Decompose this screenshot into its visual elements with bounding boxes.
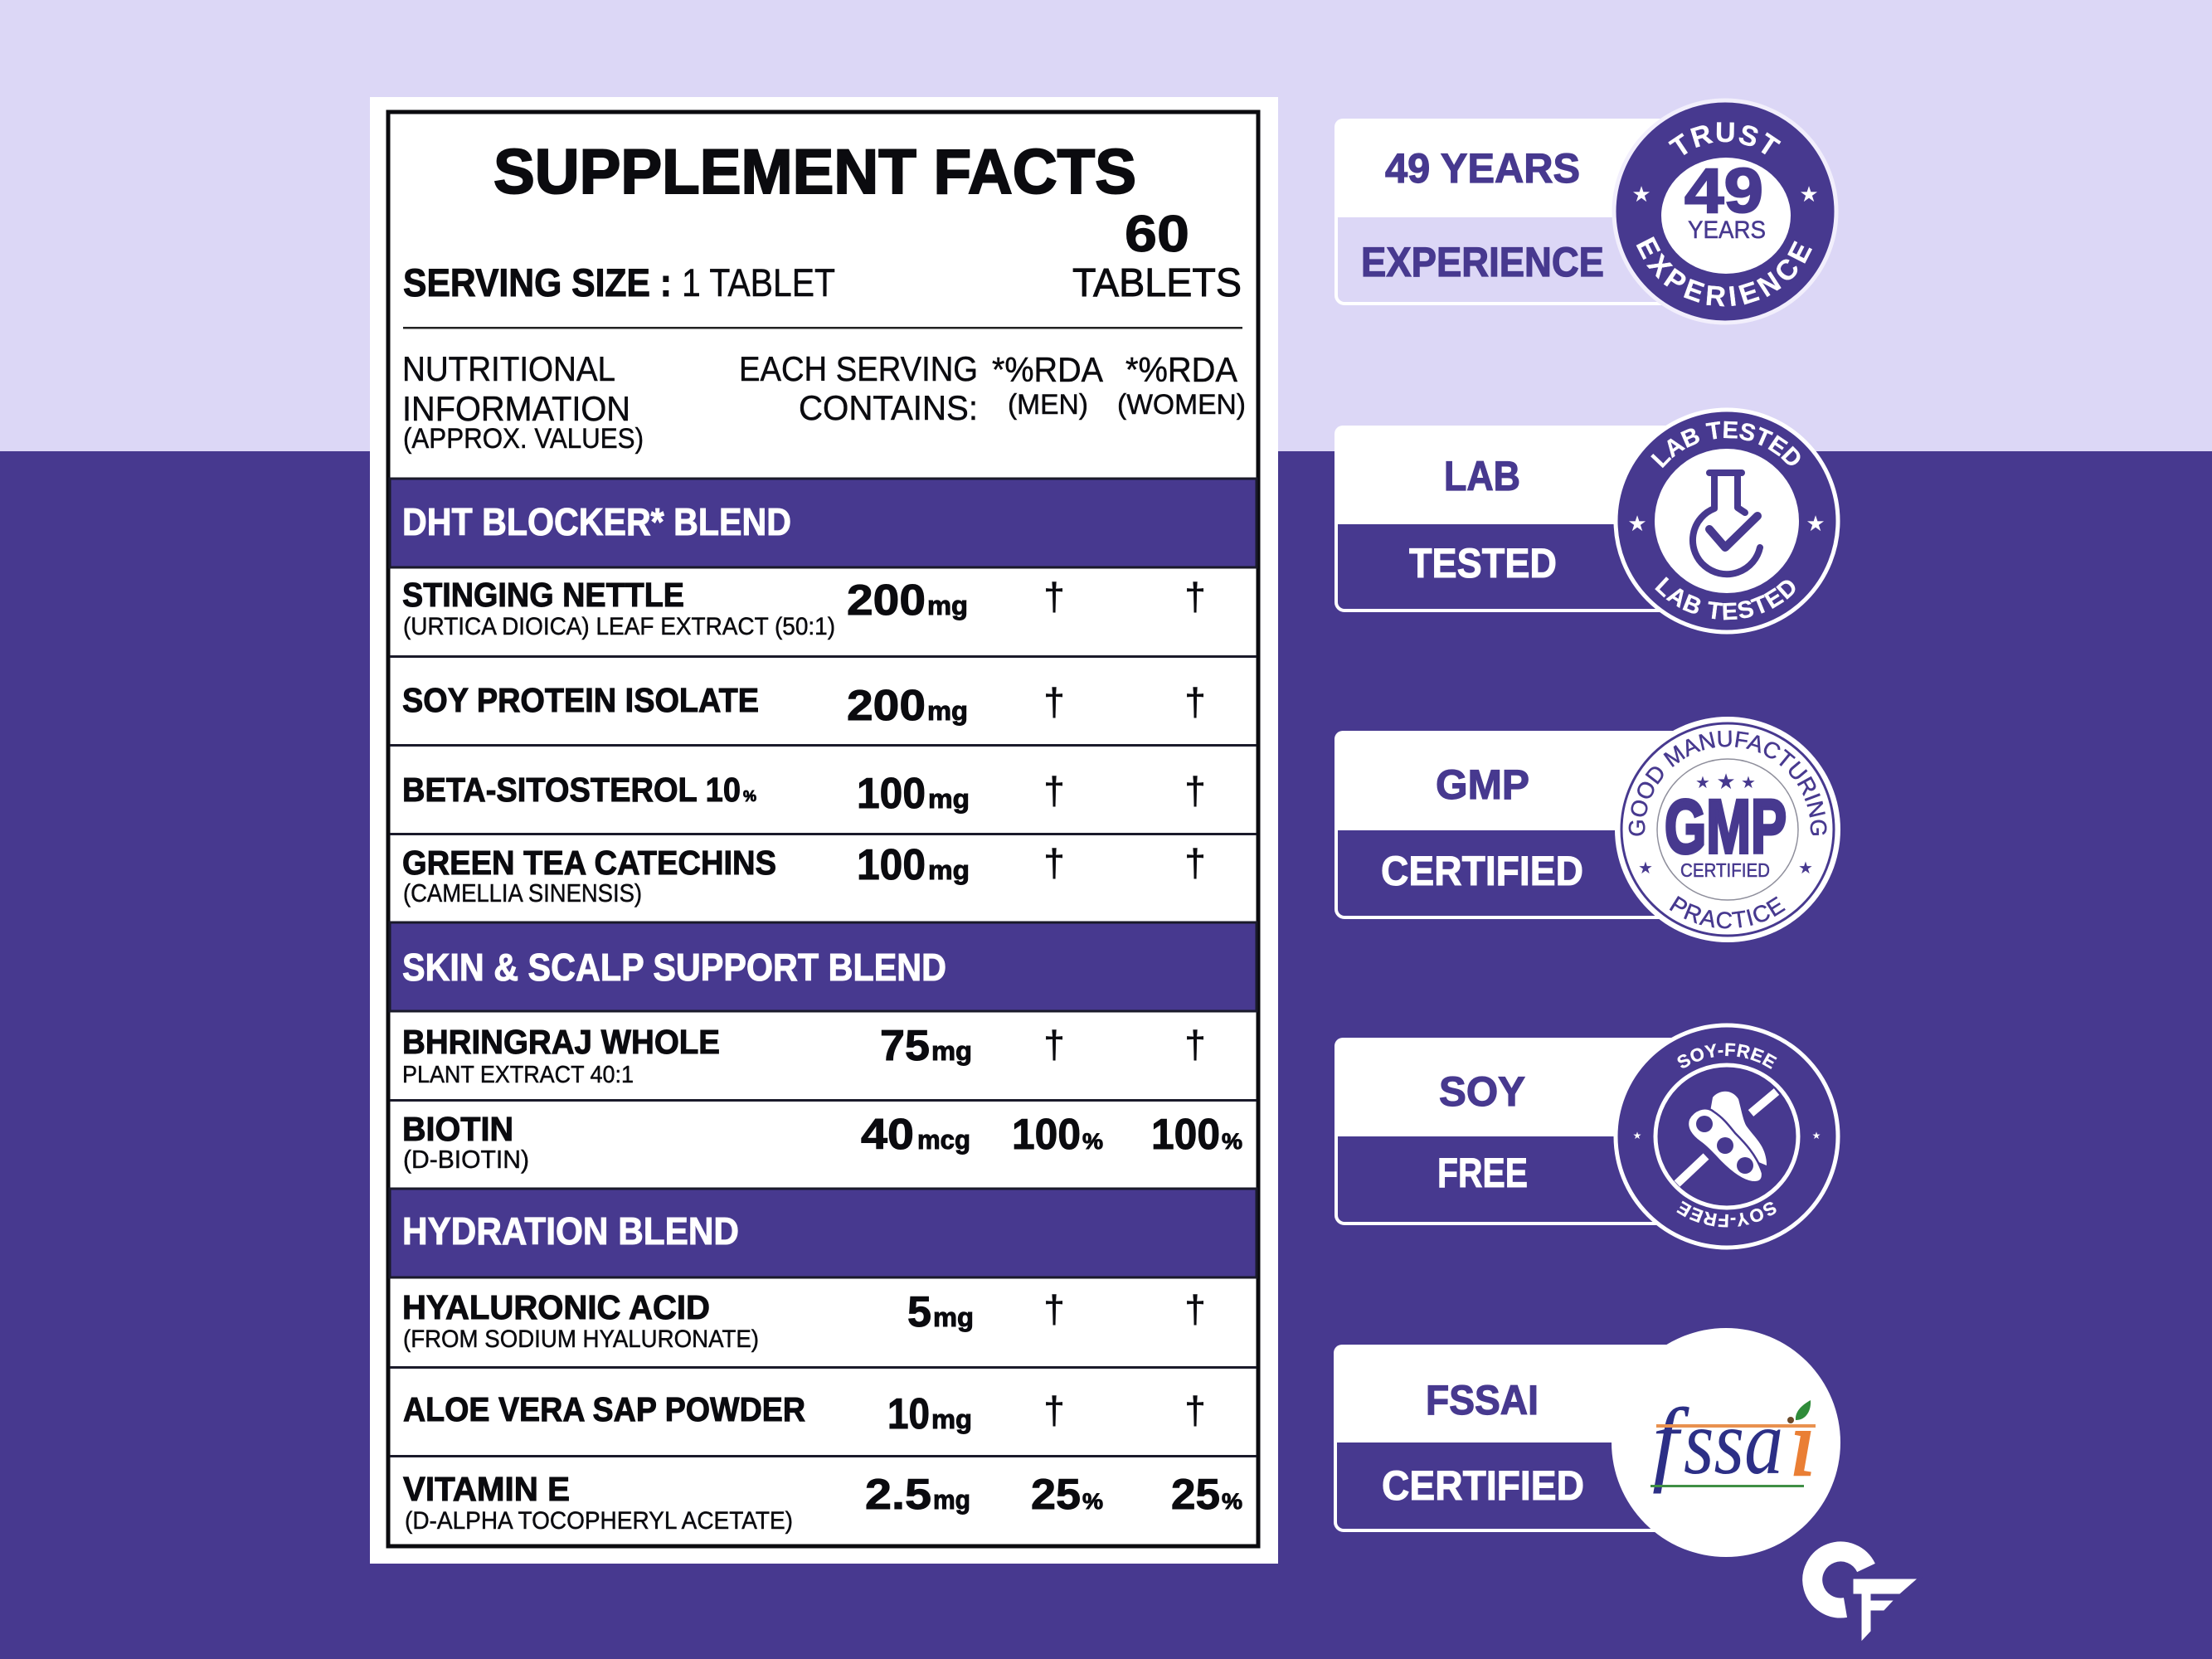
badge: GMP certified — [1334, 717, 1840, 942]
row: stinging nettle: STINGING NETTLE — [402, 576, 684, 614]
row: hyaluronic acid: (FROM SODIUM HYALURONATE) — [403, 1326, 759, 1353]
row: aloe vera: † — [1184, 1389, 1206, 1432]
seal: crossed-out soybean: SOY-FREE — [1677, 1044, 1777, 1069]
row: green tea catechins: mg — [928, 855, 970, 885]
row: stinging nettle: † — [1043, 575, 1065, 618]
row: green tea catechins: † — [1043, 841, 1065, 884]
row: aloe vera: 10 — [887, 1390, 930, 1438]
row: green tea catechins — [402, 841, 1206, 907]
label box — [1334, 119, 1718, 304]
title: SUPPLEMENT FACTS — [493, 137, 1136, 207]
row: aloe vera — [403, 1389, 1206, 1438]
row: beta-sitosterol: BETA-SITOSTEROL 10 — [402, 771, 741, 809]
seal: crossed-out soybean: ★ — [1633, 1130, 1641, 1141]
row: soy protein isolate: † — [1184, 680, 1206, 723]
row: stinging nettle: 200 — [847, 577, 926, 625]
column header: RDA men: *%RDA — [992, 350, 1103, 389]
card black frame — [388, 112, 1258, 1546]
seal: trust 49 years: ★ — [1631, 182, 1651, 207]
label box — [1334, 731, 1718, 917]
row: hyaluronic acid: mg — [933, 1302, 974, 1332]
seal: good manufacturing practice: ★ — [1638, 859, 1653, 878]
row: bhringraj: BHRINGRAJ WHOLE — [402, 1023, 720, 1061]
pack count — [1072, 206, 1242, 305]
label box — [1334, 1345, 1717, 1530]
row: soy protein isolate: mg — [927, 696, 968, 726]
serving size — [403, 260, 835, 304]
seal: trust 49 years: ★ — [1799, 182, 1819, 207]
column header: each serving contains: CONTAINS: — [799, 388, 978, 427]
label box — [1334, 1038, 1718, 1224]
row: beta-sitosterol: 100 — [857, 770, 926, 818]
label box: 49 YEARS — [1385, 145, 1580, 192]
row: bhringraj: PLANT EXTRACT 40:1 — [402, 1062, 634, 1088]
row: hyaluronic acid: † — [1043, 1287, 1065, 1331]
row: beta-sitosterol: mg — [928, 784, 970, 814]
row: biotin: BIOTIN — [402, 1110, 513, 1148]
column header: each serving contains — [739, 349, 978, 427]
column header: nutritional information — [402, 349, 644, 455]
column header: nutritional information: (APPROX. VALUES) — [403, 423, 644, 455]
row: beta-sitosterol: % — [743, 788, 756, 805]
section: hydration blend — [390, 1189, 1257, 1277]
row: vitamin e: 25 — [1171, 1471, 1220, 1519]
row: vitamin e: mg — [933, 1485, 970, 1515]
label box: EXPERIENCE — [1361, 239, 1604, 285]
seal: fssai logo — [1612, 1328, 1840, 1557]
row: biotin: (D-BIOTIN) — [403, 1145, 529, 1174]
row: beta-sitosterol: † — [1043, 769, 1065, 812]
seal: good manufacturing practice: ★ — [1695, 774, 1710, 792]
row: vitamin e: (D-ALPHA TOCOPHERYL ACETATE) — [405, 1507, 793, 1535]
label box: CERTIFIED — [1382, 1462, 1584, 1509]
row: green tea catechins: GREEN TEA CATECHINS — [402, 844, 776, 882]
seal: good manufacturing practice: ★ — [1741, 774, 1756, 792]
row: stinging nettle: † — [1184, 575, 1206, 618]
row: stinging nettle: mg — [927, 591, 968, 620]
row: bhringraj: † — [1043, 1023, 1065, 1066]
seal: flask with check: LAB TESTED — [1655, 577, 1795, 620]
seal: fssai logo: f — [1652, 1389, 1689, 1494]
seal: flask with check: LAB TESTED — [1650, 421, 1800, 468]
row: hyaluronic acid: HYALURONIC ACID — [402, 1288, 710, 1326]
row: stinging nettle — [402, 575, 1206, 640]
row: soy protein isolate: 200 — [847, 682, 926, 730]
row: soy protein isolate: SOY PROTEIN ISOLATE — [402, 681, 759, 719]
row: hyaluronic acid — [402, 1287, 1206, 1353]
serving size: 1 TABLET — [682, 260, 835, 304]
seal: trust 49 years — [1612, 98, 1838, 325]
column header: each serving contains: EACH SERVING — [739, 349, 978, 388]
label box: GMP — [1436, 761, 1529, 808]
seal: good manufacturing practice — [1615, 717, 1840, 942]
section: skin and scalp support blend — [390, 922, 1257, 1011]
row: vitamin e: VITAMIN E — [403, 1470, 570, 1508]
row: vitamin e: % — [1082, 1489, 1103, 1514]
row: hyaluronic acid: 5 — [907, 1288, 931, 1336]
seal: trust 49 years: 49 — [1685, 156, 1763, 226]
label box: LAB — [1444, 453, 1520, 499]
card white backing — [370, 97, 1278, 1564]
seal: trust 49 years: EXPERIENCE — [1636, 236, 1812, 307]
row: biotin: mcg — [917, 1125, 970, 1155]
row: aloe vera: mg — [931, 1404, 972, 1434]
column header: RDA women — [1117, 350, 1246, 421]
seal: good manufacturing practice: PRACTICE — [1669, 896, 1786, 929]
row: bhringraj: † — [1184, 1023, 1206, 1066]
seal: crossed-out soybean: ★ — [1812, 1130, 1821, 1141]
seal: crossed-out soybean: SOY-FREE — [1676, 1201, 1777, 1228]
brand logo: CF — [1812, 1551, 1920, 1644]
row: green tea catechins: † — [1184, 841, 1206, 884]
section: DHT blocker blend: DHT BLOCKER* BLEND — [402, 500, 791, 543]
seal: crossed-out soybean — [1614, 1024, 1840, 1249]
column header: RDA women: (WOMEN) — [1117, 389, 1246, 421]
badge: soy free — [1334, 1024, 1840, 1249]
seal: flask with check: ★ — [1627, 511, 1647, 536]
row: biotin: % — [1222, 1129, 1242, 1154]
section: hydration blend: HYDRATION BLEND — [402, 1209, 739, 1253]
row: hyaluronic acid: † — [1184, 1287, 1206, 1331]
seal: good manufacturing practice: ★ — [1798, 859, 1813, 878]
panel: supplement facts card — [370, 97, 1278, 1564]
row: soy protein isolate — [402, 680, 1206, 730]
seal: flask with check: ★ — [1806, 511, 1826, 536]
label box: TESTED — [1409, 540, 1557, 586]
column header: nutritional information: NUTRITIONAL — [402, 349, 615, 388]
seal: trust 49 years: TRUST — [1668, 122, 1782, 155]
label box: SOY — [1439, 1068, 1525, 1115]
background: purple lower band — [0, 451, 2212, 1659]
row: bhringraj — [402, 1022, 1206, 1088]
row: vitamin e: % — [1222, 1489, 1242, 1514]
label box: FREE — [1437, 1150, 1528, 1196]
row: soy protein isolate: † — [1043, 680, 1065, 723]
label box: FSSAI — [1426, 1377, 1539, 1423]
seal: good manufacturing practice: CERTIFIED — [1680, 859, 1770, 881]
row: biotin: 100 — [1151, 1111, 1220, 1159]
row: beta-sitosterol: † — [1184, 769, 1206, 812]
row: biotin: % — [1082, 1129, 1103, 1154]
row: aloe vera: ALOE VERA SAP POWDER — [403, 1390, 805, 1428]
seal: trust 49 years: YEARS — [1688, 216, 1766, 244]
section: DHT blocker blend — [390, 479, 1257, 567]
seal: good manufacturing practice: GMP — [1665, 785, 1787, 869]
row: beta-sitosterol — [402, 769, 1206, 818]
seal: fssai logo: ı — [1790, 1393, 1816, 1496]
row: bhringraj: mg — [931, 1036, 972, 1066]
column header: RDA women: *%RDA — [1125, 350, 1237, 389]
row: bhringraj: 75 — [880, 1022, 930, 1070]
column header: RDA men — [992, 350, 1103, 421]
row: stinging nettle: (URTICA DIOICA) LEAF EXTRACT (50:1) — [403, 613, 835, 640]
row: biotin — [402, 1110, 1242, 1174]
row: biotin: 100 — [1012, 1111, 1081, 1159]
badge: lab tested — [1334, 408, 1840, 634]
seal: fssai logo: ssa — [1684, 1391, 1783, 1494]
label box — [1334, 426, 1718, 611]
row: green tea catechins: 100 — [857, 841, 926, 889]
badge: 49 years experience — [1334, 98, 1838, 325]
row: green tea catechins: (CAMELLIA SINENSIS) — [403, 878, 642, 907]
column header: RDA men: (MEN) — [1008, 389, 1088, 421]
row: aloe vera: † — [1043, 1389, 1065, 1432]
pack count: 60 — [1125, 206, 1189, 263]
seal: good manufacturing practice: ★ — [1716, 769, 1736, 794]
serving size: SERVING SIZE : — [403, 260, 672, 304]
pack count: TABLETS — [1072, 261, 1242, 305]
seal: good manufacturing practice: GOOD MANUFACTURING — [1629, 730, 1826, 836]
row: vitamin e: 25 — [1031, 1471, 1081, 1519]
badge: FSSAI certified — [1334, 1328, 1840, 1557]
seal: flask with check — [1614, 408, 1840, 634]
row: biotin: 40 — [861, 1111, 914, 1159]
row: vitamin e: 2.5 — [865, 1471, 931, 1519]
column header: nutritional information: INFORMATION — [402, 389, 630, 428]
background: lavender upper band — [0, 0, 2212, 451]
row: vitamin e — [403, 1470, 1242, 1535]
section: skin and scalp support blend: SKIN & SCALP SUPPORT BLEND — [402, 946, 946, 989]
label box: CERTIFIED — [1381, 848, 1583, 894]
